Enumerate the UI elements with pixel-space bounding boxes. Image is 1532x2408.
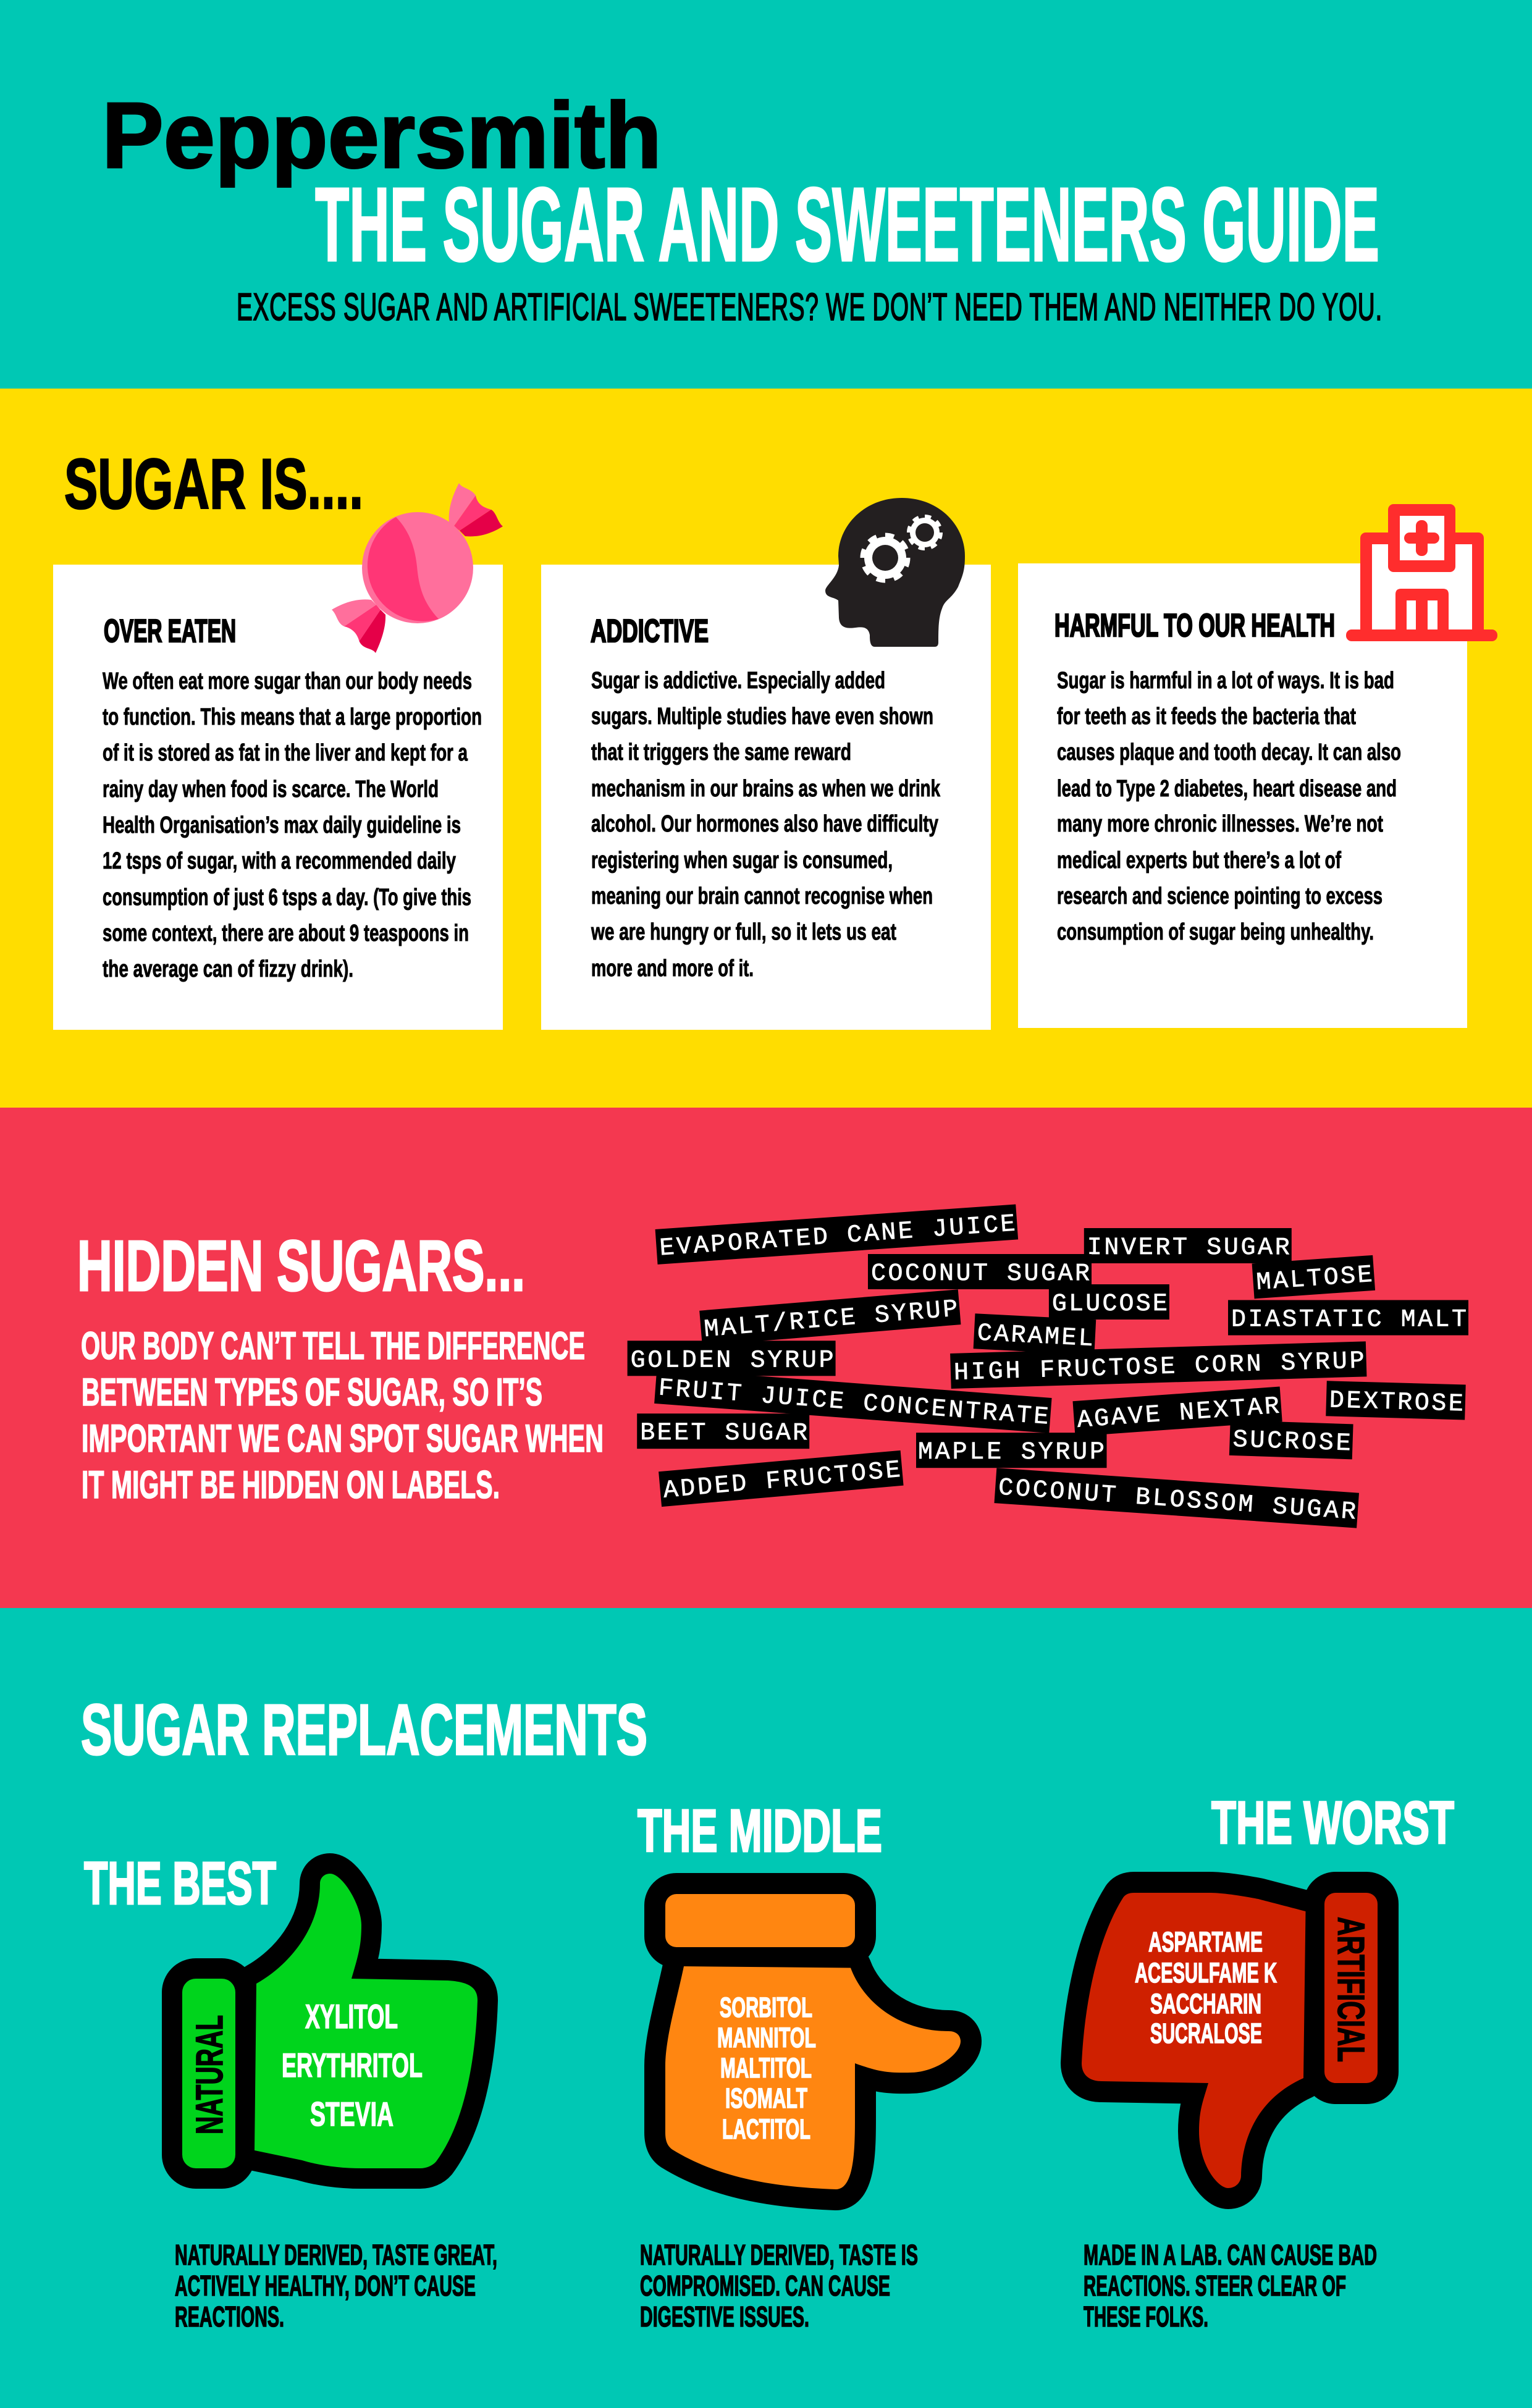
caption: the best: NATURALLY DERIVED, TASTE GREAT, <box>175 2239 497 2271</box>
label: added fructose: ADDED FRUCTOSE <box>662 1457 901 1505</box>
heading: the middle: THE MIDDLE <box>638 1797 882 1864</box>
card text: over eaten: 12 tsps of sugar, with a recommended daily <box>103 848 456 874</box>
card text: addictive: alcohol. Our hormones also have difficulty <box>591 811 938 837</box>
card text: addictive: that it triggers the same reward <box>591 739 851 765</box>
list: worst sweeteners: ACESULFAME K <box>1135 1957 1277 1989</box>
label: caramel: CARAMEL <box>977 1320 1094 1353</box>
list: best sweeteners: STEVIA <box>310 2095 394 2133</box>
card text: harmful <box>1057 668 1401 945</box>
card text: addictive: we are hungry or full, so it lets us eat <box>591 919 896 945</box>
label: fruit juice concentrate: FRUIT JUICE CONCENTRATE <box>657 1374 1050 1432</box>
label: natural: NATURAL <box>188 2015 230 2134</box>
label: diastatic malt: DIASTATIC MALT <box>1231 1306 1467 1334</box>
panel: sugar replacements <box>0 1608 1532 2408</box>
list: best sweeteners: XYLITOL <box>305 1997 398 2035</box>
label: beet sugar: BEET SUGAR <box>640 1420 807 1447</box>
list: middle sweeteners: LACTITOL <box>722 2113 810 2145</box>
card text: harmful: many more chronic illnesses. We’re not <box>1057 811 1383 837</box>
card: over eaten <box>53 565 503 1030</box>
caption: the best <box>175 2239 497 2333</box>
card text: over eaten: consumption of just 6 tsps a day. (To give this <box>103 885 471 911</box>
card text: over eaten: rainy day when food is scarce. The World <box>103 777 439 802</box>
label: dextrose: DEXTROSE <box>1329 1387 1463 1418</box>
caption: the best: ACTIVELY HEALTHY, DON’T CAUSE <box>175 2270 476 2302</box>
card text: over eaten: the average can of fizzy drink). <box>103 956 353 982</box>
sugar name labels <box>628 1204 1468 1528</box>
label: high fructose corn syrup: HIGH FRUCTOSE CORN SYRUP <box>953 1347 1365 1387</box>
card text: harmful: medical experts but there’s a lot of <box>1057 848 1341 874</box>
caption: the worst <box>1084 2239 1377 2333</box>
label: agave nextar: AGAVE NEXTAR <box>1076 1393 1281 1435</box>
label: coconut sugar: COCONUT SUGAR <box>871 1260 1090 1288</box>
card text: over eaten: some context, there are about 9 teaspoons in <box>103 920 469 946</box>
icon: head with gears <box>825 498 965 647</box>
panel: header <box>0 0 1532 389</box>
list: worst sweeteners <box>1135 1926 1277 2049</box>
icon: thumbs up <box>182 1874 478 2168</box>
card text: over eaten: We often eat more sugar than our body needs <box>103 668 472 694</box>
card text: harmful: causes plaque and tooth decay. It can also <box>1057 739 1401 765</box>
heading: hidden sugars: HIDDEN SUGARS... <box>77 1226 525 1306</box>
caption: the middle: NATURALLY DERIVED, TASTE IS <box>640 2239 918 2271</box>
text: hidden sugars description: BETWEEN TYPES OF SUGAR, SO IT’S <box>82 1371 542 1414</box>
caption: the best: REACTIONS. <box>175 2301 284 2333</box>
text: hidden sugars description: IMPORTANT WE CAN SPOT SUGAR WHEN <box>82 1417 604 1460</box>
text: hidden sugars description: OUR BODY CAN’T TELL THE DIFFERENCE <box>81 1324 585 1368</box>
label: malt/rice syrup: MALT/RICE SYRUP <box>703 1295 959 1344</box>
card heading: addictive: ADDICTIVE <box>591 613 709 649</box>
card text: addictive: sugars. Multiple studies have even shown <box>591 704 933 730</box>
card text: addictive: registering when sugar is consumed, <box>591 848 893 874</box>
card heading: harmful: HARMFUL TO OUR HEALTH <box>1054 608 1335 644</box>
label: coconut blossom sugar: COCONUT BLOSSOM SUGAR <box>998 1475 1357 1526</box>
icon: hospital <box>1346 504 1497 641</box>
panel: hidden sugars <box>0 1108 1532 1608</box>
list: worst sweeteners: SUCRALOSE <box>1150 2018 1262 2049</box>
heading: the best: THE BEST <box>84 1850 276 1917</box>
label: glucose: GLUCOSE <box>1052 1290 1168 1318</box>
list: middle sweeteners: MANNITOL <box>717 2022 816 2053</box>
label: golden syrup: GOLDEN SYRUP <box>631 1347 834 1374</box>
list: middle sweeteners: ISOMALT <box>725 2082 807 2114</box>
label: sucrose: SUCROSE <box>1232 1426 1351 1458</box>
list: best sweeteners <box>282 1997 423 2133</box>
caption: the middle <box>640 2239 918 2333</box>
list: middle sweeteners: SORBITOL <box>720 1992 812 2023</box>
card text: harmful: research and science pointing to excess <box>1057 883 1383 909</box>
list: best sweeteners: ERYTHRITOL <box>282 2046 423 2084</box>
caption: the worst: REACTIONS. STEER CLEAR OF <box>1084 2270 1346 2302</box>
card text: over eaten <box>103 668 482 982</box>
card text: harmful: lead to Type 2 diabetes, heart disease and <box>1057 776 1397 802</box>
card text: addictive: more and more of it. <box>591 956 754 982</box>
label: artificial: ARTIFICIAL <box>1330 1917 1372 2062</box>
card text: over eaten: Health Organisation’s max daily guideline is <box>103 812 461 838</box>
card text: harmful: for teeth as it feeds the bacteria that <box>1057 704 1356 730</box>
list: worst sweeteners: ASPARTAME <box>1148 1926 1263 1958</box>
caption: the worst: THESE FOLKS. <box>1084 2301 1208 2333</box>
card text: addictive: Sugar is addictive. Especially added <box>591 668 885 694</box>
list: worst sweeteners: SACCHARIN <box>1150 1988 1261 2019</box>
icon: sideways mitten <box>665 1894 961 2189</box>
label: invert sugar: INVERT SUGAR <box>1087 1234 1290 1262</box>
card text: over eaten: to function. This means that a large proportion <box>103 704 482 730</box>
heading: sugar is: SUGAR IS.... <box>64 445 363 524</box>
list: middle sweeteners <box>717 1992 816 2145</box>
label: maple syrup: MAPLE SYRUP <box>918 1439 1105 1467</box>
caption: the middle: COMPROMISED. CAN CAUSE <box>640 2270 890 2302</box>
card text: addictive: meaning our brain cannot recognise when <box>591 883 933 909</box>
card: addictive <box>541 565 991 1030</box>
card: harmful <box>1018 563 1467 1028</box>
card text: addictive <box>591 668 941 982</box>
icon: candy <box>332 483 503 653</box>
caption: the middle: DIGESTIVE ISSUES. <box>640 2301 809 2333</box>
card heading: over eaten: OVER EATEN <box>104 613 236 649</box>
text: hidden sugars description <box>81 1324 604 1507</box>
card text: addictive: mechanism in our brains as when we drink <box>591 776 941 802</box>
text: hidden sugars description: IT MIGHT BE HIDDEN ON LABELS. <box>82 1463 500 1507</box>
label: evaporated cane juice: EVAPORATED CANE JUICE <box>659 1211 1016 1263</box>
brand name: Peppersmith <box>102 83 662 187</box>
panel: sugar is <box>0 389 1532 1108</box>
list: middle sweeteners: MALTITOL <box>720 2052 812 2084</box>
heading: sugar replacements: SUGAR REPLACEMENTS <box>81 1690 647 1770</box>
label: maltose: MALTOSE <box>1255 1261 1373 1297</box>
card text: harmful: consumption of sugar being unhealthy. <box>1057 919 1374 945</box>
card text: harmful: Sugar is harmful in a lot of ways. It is bad <box>1057 668 1394 694</box>
icon: thumbs down <box>1082 1893 1378 2188</box>
card text: over eaten: of it is stored as fat in the liver and kept for a <box>103 740 468 766</box>
